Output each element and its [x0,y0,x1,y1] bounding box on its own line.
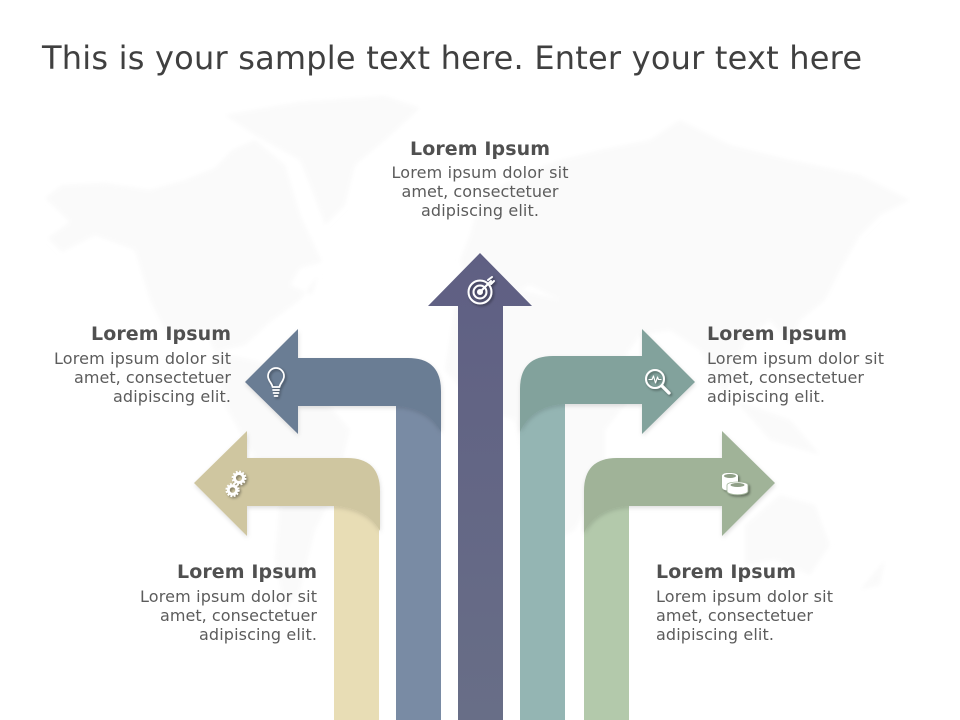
world map background [45,96,910,610]
map: Islands [735,400,885,590]
heading: left lower: Lorem Ipsum [177,561,317,583]
arrow: green right [584,431,775,720]
icon: light bulb [268,368,284,396]
arrow: teal right [520,329,695,720]
arrow head and bend: sage [584,431,775,536]
arrow: yellow left [194,431,380,720]
heading: top center: Lorem Ipsum [410,138,550,160]
body: right lower: amet, consectetuer [656,606,813,625]
arrow head and bend: tan [194,431,380,536]
body: right lower: adipiscing elit. [656,625,774,644]
icon: gears [226,472,246,496]
heading: right upper: Lorem Ipsum [707,323,847,345]
heading: left upper: Lorem Ipsum [91,323,231,345]
body: top center: amet, consectetuer [402,182,559,201]
text: top center [392,138,568,220]
arrow: center up [428,253,532,720]
body: right upper: amet, consectetuer [707,368,864,387]
body: right lower [656,587,833,644]
body: top center: Lorem ipsum dolor sit [392,163,568,182]
icon: coins [722,473,748,495]
body: right upper: Lorem ipsum dolor sit [707,349,884,368]
title: This is your sample text here. Enter your text here [41,39,862,77]
body: top center: adipiscing elit. [421,201,539,220]
map: South America [215,352,350,610]
body: left lower: adipiscing elit. [199,625,317,644]
icon: target [468,277,494,304]
body: left lower [140,587,317,644]
text: left upper [54,323,231,406]
map: Greenland [225,96,420,225]
body: left lower: amet, consectetuer [160,606,317,625]
text: right upper [707,323,884,406]
body: left upper: amet, consectetuer [74,368,231,387]
body: left lower: Lorem ipsum dolor sit [140,587,317,606]
heading: right lower: Lorem Ipsum [656,561,796,583]
text: left lower [140,561,317,644]
text: right lower [656,561,833,644]
body: right upper: adipiscing elit. [707,387,825,406]
map: North America [45,140,322,352]
map: Eurasia [460,120,910,395]
body: left upper [54,349,231,406]
arrow head and bend: teal [520,329,695,434]
body: top center [392,163,568,220]
body: left upper: adipiscing elit. [113,387,231,406]
icon: magnifier with pulse [646,370,669,393]
arrow: blue left [245,329,441,720]
body: right lower: Lorem ipsum dolor sit [656,587,833,606]
body: left upper: Lorem ipsum dolor sit [54,349,231,368]
body: right upper [707,349,884,406]
map: Africa [445,285,640,545]
map: Australia [745,495,830,575]
arrow head and bend: slate blue [245,329,441,434]
